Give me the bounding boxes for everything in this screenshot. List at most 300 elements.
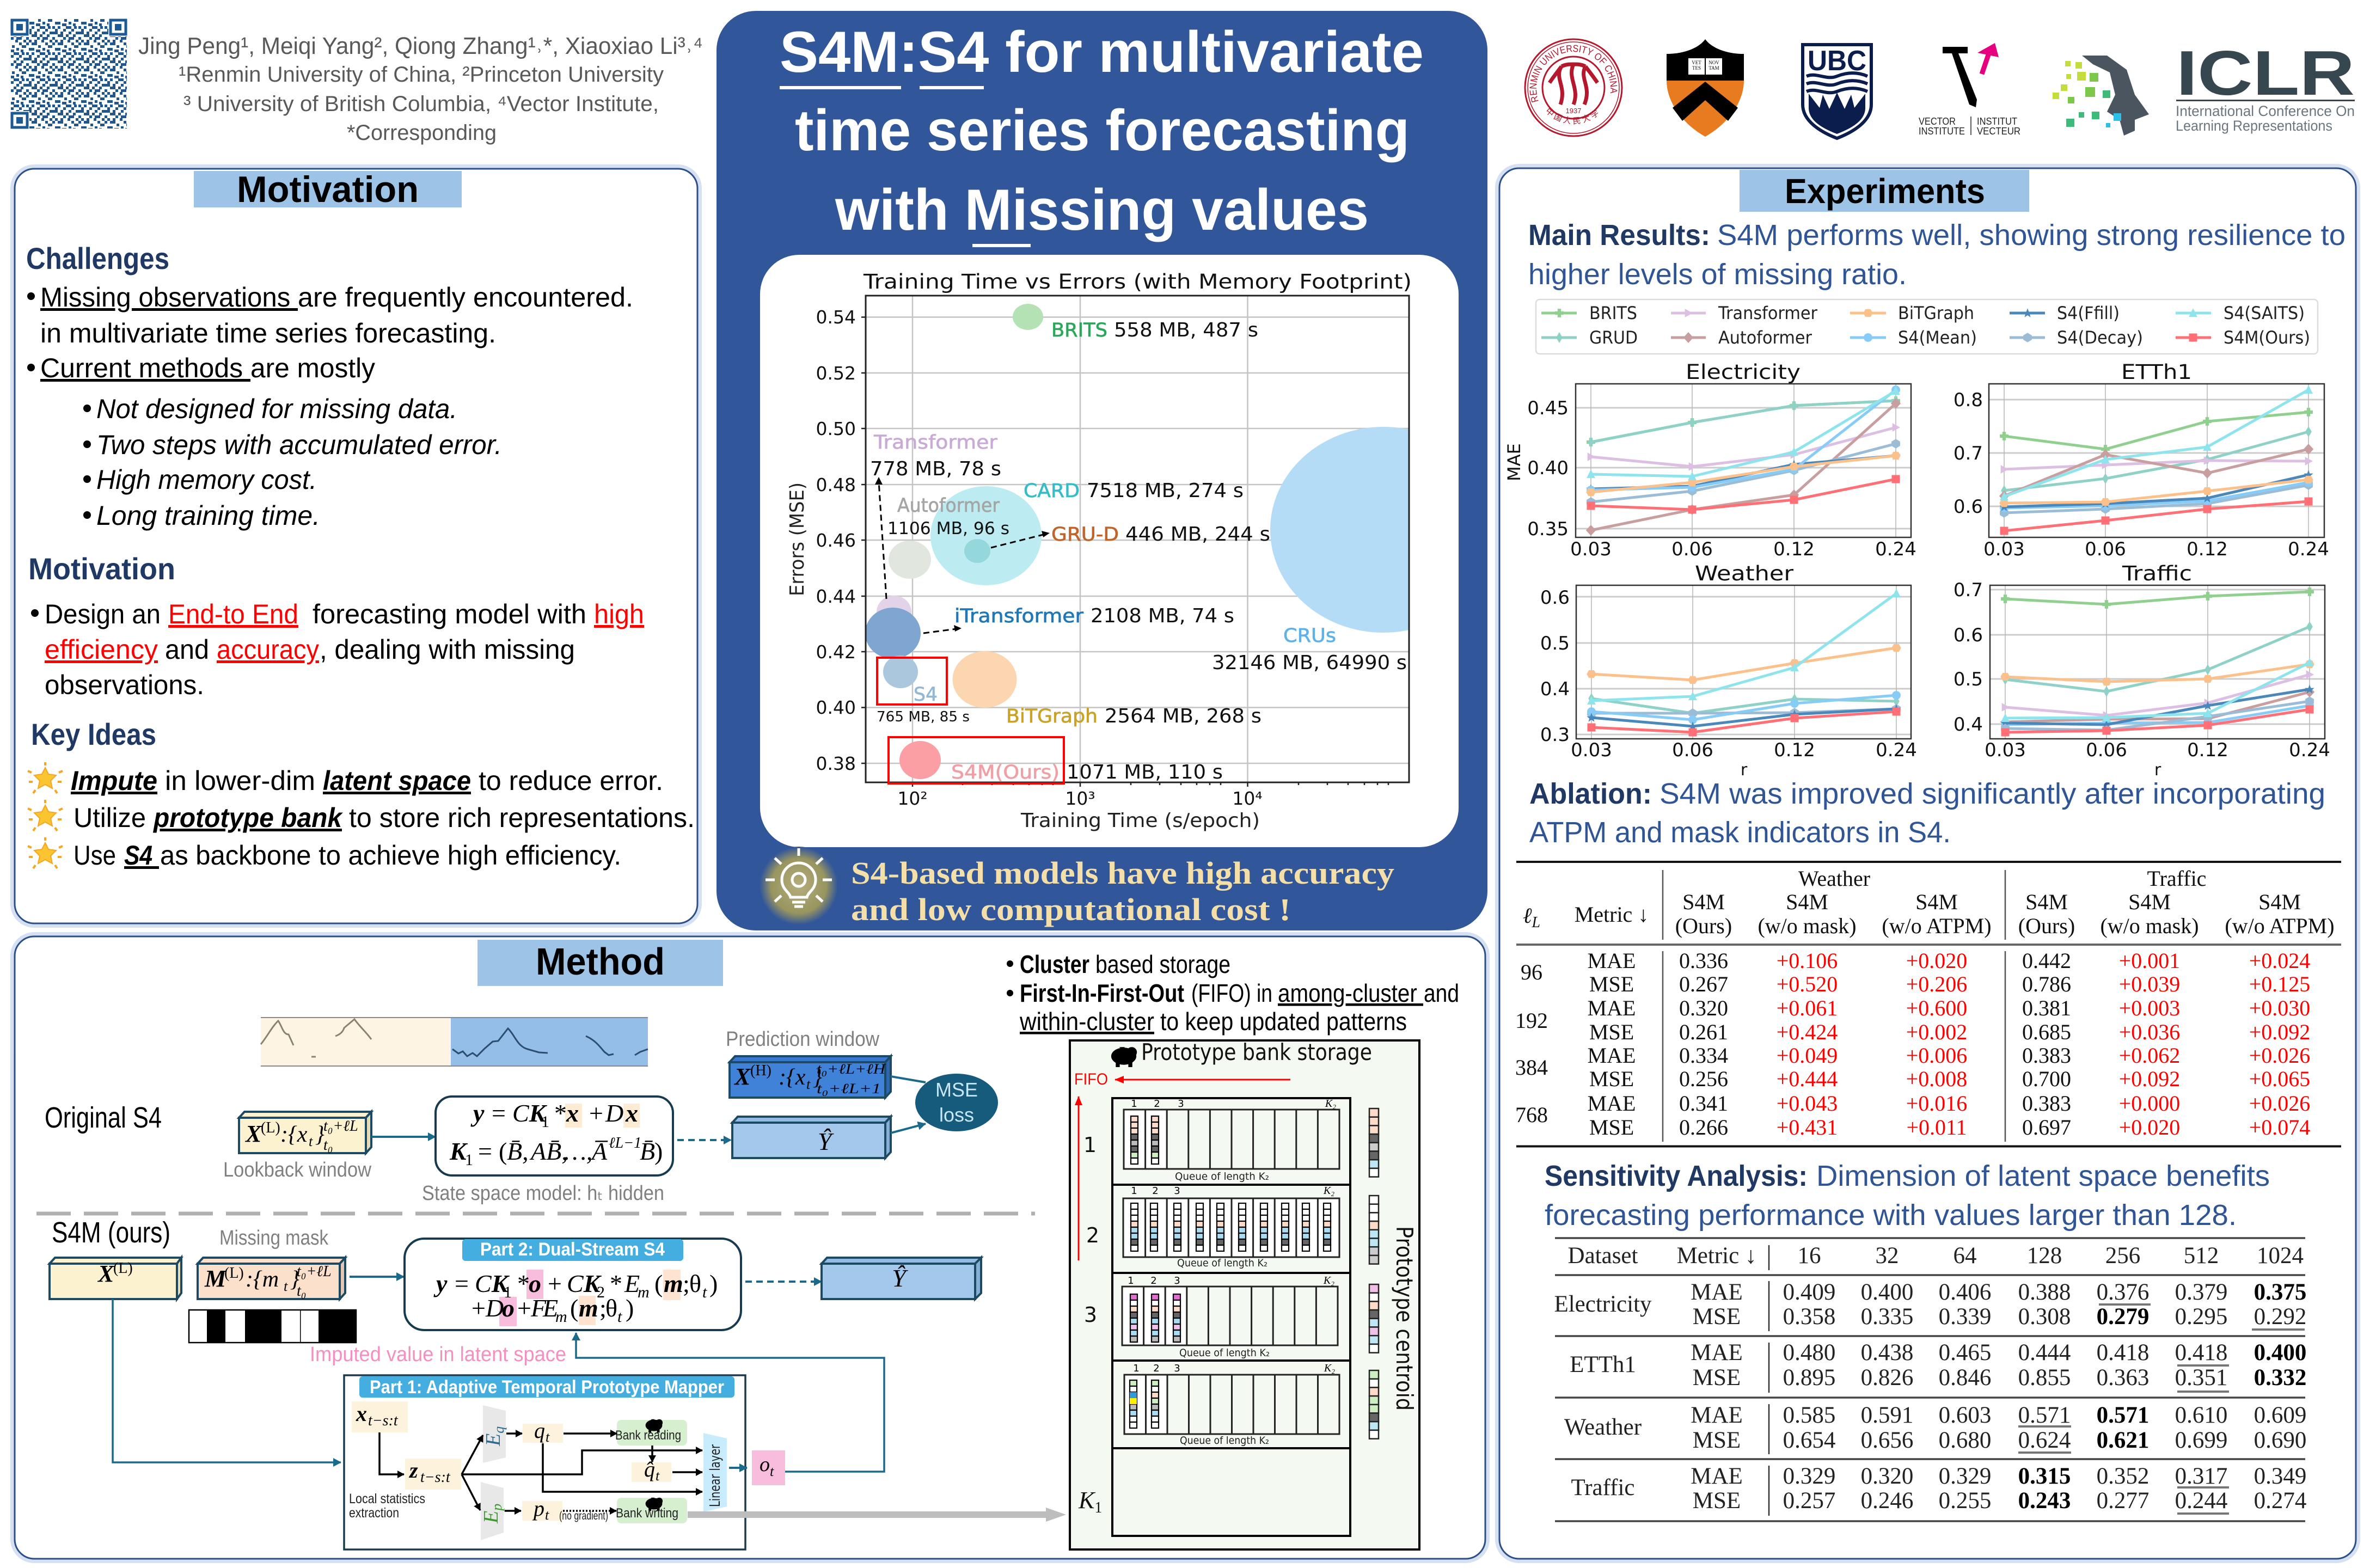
equation: o <box>502 1294 515 1322</box>
label: part 2: Part 2: Dual-Stream S4 <box>480 1239 665 1260</box>
prototype bank storage <box>1070 1039 1419 1549</box>
bubble labels <box>870 319 1407 783</box>
queue cluster 3: 1 <box>1128 1275 1134 1287</box>
takeaway text: and low computational cost ! <box>851 892 1291 927</box>
challenges bullets: are mostly <box>250 353 375 383</box>
bank reading <box>615 1419 687 1445</box>
table: sensitivity analysis: 0.591 <box>1861 1402 1913 1428</box>
bubble labels: 558 MB, 487 s <box>1114 319 1258 341</box>
table: sensitivity analysis: 0.329 <box>1939 1463 1991 1489</box>
linear layer <box>703 1433 727 1512</box>
variable chips: t <box>656 1468 660 1484</box>
line chart: electricity: 0.24 <box>1875 538 1916 560</box>
table: ablation results: +0.003 <box>2119 996 2180 1020</box>
storage notes: among-cluster <box>1278 979 1423 1007</box>
table: ablation results: (Ours) <box>2018 914 2075 938</box>
table: ablation results: MSE <box>1589 972 1634 996</box>
caption: imputed value: Imputed value in latent space <box>310 1343 566 1366</box>
state space equation box: ℓL−1 <box>609 1135 641 1152</box>
dashed arrows <box>875 477 1050 633</box>
sensitivity analysis text: Sensitivity Analysis: <box>1545 1160 1808 1192</box>
table: ablation results: +0.001 <box>2119 948 2180 973</box>
table: sensitivity analysis: Traffic <box>1571 1475 1635 1500</box>
bank writing <box>616 1498 687 1523</box>
equation: ; <box>599 1294 607 1322</box>
queue cluster 4: 1 <box>1133 1363 1140 1374</box>
chart legend: Autoformer <box>1718 327 1812 348</box>
variable chips: x <box>356 1401 367 1426</box>
table: ablation results: 0.266 <box>1679 1115 1728 1140</box>
sensitivity analysis text: Dimension of latent space benefits <box>1816 1160 2270 1192</box>
logo: ICLR: International Conference On <box>2176 103 2355 119</box>
queue cluster 3: K₂ <box>1323 1275 1334 1287</box>
table: sensitivity analysis: MAE <box>1691 1402 1743 1428</box>
state space equation box: 1 <box>465 1151 473 1169</box>
chart legend: S4(SAITS) <box>2224 303 2305 323</box>
line chart: weather: 0.6 <box>1540 587 1570 609</box>
logo: Princeton University: NOV <box>1708 60 1719 65</box>
queue cluster 1: 2 <box>1154 1098 1160 1110</box>
table: ablation results: 192 <box>1515 1008 1548 1033</box>
bubble labels: 1106 MB, 96 s <box>887 519 1009 538</box>
bubble labels: iTransformer <box>954 605 1084 627</box>
logo: Vector Institute <box>1919 43 2020 137</box>
table: ablation results: (w/o mask) <box>2100 914 2199 938</box>
table: sensitivity analysis: 0.621 <box>2097 1428 2149 1453</box>
table: ablation results: MAE <box>1588 1043 1636 1068</box>
equation: y <box>433 1270 448 1297</box>
table: sensitivity analysis: 128 <box>2027 1243 2062 1269</box>
line chart: electricity: 0.12 <box>1773 538 1815 560</box>
y axis tick labels: 0.44 <box>816 586 856 607</box>
label: S4M (ours): S4M (ours) <box>52 1216 170 1249</box>
line chart: ETTh1 <box>1954 360 2329 560</box>
table: sensitivity analysis: 0.358 <box>1783 1304 1835 1330</box>
logo: Vector Institute: VECTOR <box>1919 116 1956 127</box>
centroid stacks <box>1369 1108 1379 1439</box>
queue cluster 3: 3 <box>1174 1275 1180 1287</box>
part 1: adaptive temporal prototype mapper <box>344 1375 745 1549</box>
ground truth box: X <box>733 1063 751 1090</box>
table: sensitivity analysis: 32 <box>1875 1243 1899 1269</box>
table: sensitivity analysis: 0.255 <box>1939 1488 1991 1514</box>
queue cluster 4: K₂ <box>1324 1362 1335 1374</box>
table: ablation results: +0.106 <box>1777 948 1838 973</box>
state space equation box <box>436 1097 673 1175</box>
challenges bullets: in multivariate time series forecasting. <box>40 318 496 348</box>
table: ablation results: +0.016 <box>1906 1091 1967 1116</box>
bubble labels: 765 MB, 85 s <box>877 709 970 725</box>
input box: lookback window: (L) <box>261 1119 280 1136</box>
main results text: higher levels of missing ratio. <box>1528 258 1907 291</box>
chart legend: S4M(Ours) <box>2224 327 2310 348</box>
line chart: electricity: 0.35 <box>1527 518 1569 540</box>
caption: missing mask: Missing mask <box>219 1227 329 1250</box>
table: sensitivity analysis: 0.349 <box>2254 1463 2306 1489</box>
equation: ( <box>570 1294 578 1322</box>
table: ablation results: S4M <box>2128 890 2171 914</box>
chart legend: S4(Decay) <box>2057 327 2143 348</box>
table: ablation results: +0.011 <box>1906 1115 1967 1140</box>
queue cluster 2 <box>1123 1185 1339 1269</box>
table: sensitivity analysis: 0.257 <box>1783 1488 1835 1514</box>
queue cluster 1 <box>1124 1098 1339 1183</box>
sensitivity analysis text: forecasting performance with values larger than 128. <box>1545 1199 2237 1232</box>
equation: + <box>517 1294 531 1322</box>
variable chips <box>352 1401 671 1523</box>
table: sensitivity analysis: 0.308 <box>2018 1304 2071 1330</box>
table: ablation results: +0.600 <box>1906 996 1967 1020</box>
table: ablation results: +0.065 <box>2249 1067 2310 1091</box>
internal arrows <box>379 1432 702 1511</box>
table: sensitivity analysis: 0.388 <box>2018 1279 2071 1305</box>
state space equation box: x <box>566 1099 579 1127</box>
variable chips: q̂ <box>644 1457 655 1481</box>
authors and affiliations: Jing Peng¹, Meiqi Yang², Qiong Zhang¹˒*, Xiaoxiao Li³˒⁴ <box>138 33 703 59</box>
table: ablation results: 0.334 <box>1679 1043 1728 1068</box>
queue cluster 3: 2 <box>1150 1275 1157 1287</box>
line chart: traffic: 0.03 <box>1985 739 2026 761</box>
state space equation box: AB̄, <box>529 1137 568 1165</box>
line chart: ETTh1: 0.12 <box>2187 538 2228 560</box>
sensitivity analysis text <box>1545 1160 2270 1232</box>
table: sensitivity analysis: 256 <box>2105 1243 2140 1269</box>
authors and affiliations: *Corresponding <box>347 121 497 145</box>
equation: E <box>624 1270 640 1297</box>
queue cluster 4: Queue of length K₂ <box>1180 1435 1269 1447</box>
subheading: challenges: Challenges <box>26 241 169 275</box>
variable chips: t−s:t <box>420 1469 451 1486</box>
key ideas list: Use <box>74 840 116 871</box>
panel: experiments <box>1499 168 2356 1559</box>
equation: D <box>485 1294 504 1322</box>
line chart: electricity: 0.03 <box>1570 538 1612 560</box>
equation: * <box>610 1270 622 1297</box>
caption: local statistics: Local statistics <box>349 1491 425 1506</box>
mask strip <box>189 1310 356 1343</box>
table: ablation results: +0.008 <box>1906 1067 1967 1091</box>
line chart: weather: r <box>1741 761 1748 780</box>
bubble labels: GRU-D <box>1051 524 1119 546</box>
motivation bullet: high <box>594 599 644 629</box>
equation: θ <box>689 1270 701 1297</box>
table: sensitivity analysis: 0.609 <box>2254 1402 2306 1428</box>
table: ablation results: 0.697 <box>2022 1115 2071 1140</box>
heading: motivation: Motivation <box>237 169 419 210</box>
table: sensitivity analysis: 0.418 <box>2097 1340 2149 1365</box>
key ideas list: S4 <box>124 840 159 871</box>
icon: light bulb <box>766 848 832 906</box>
logo: Renmin University of China: 1937 <box>1566 107 1581 115</box>
table: sensitivity analysis: 0.656 <box>1861 1428 1913 1453</box>
caption: lookback window: Lookback window <box>223 1159 371 1181</box>
y axis tick labels: 0.40 <box>816 697 856 718</box>
table: ablation results: MAE <box>1588 948 1636 973</box>
challenges bullets: High memory cost. <box>96 464 317 495</box>
input box: X(L): (L) <box>113 1260 133 1277</box>
FIFO arrows: FIFO <box>1074 1070 1108 1088</box>
table: ablation results: +0.061 <box>1777 996 1838 1020</box>
input box: mask M(L): (L) <box>224 1265 244 1282</box>
table: ablation results: +0.000 <box>2119 1091 2180 1116</box>
table: sensitivity analysis: 0.699 <box>2175 1428 2227 1453</box>
table: ablation results: Traffic <box>2147 866 2206 891</box>
key ideas list: latent space <box>323 765 471 796</box>
state space equation box: B̄ <box>640 1137 655 1165</box>
input box: lookback window: } <box>315 1122 324 1147</box>
cluster indices: 1 <box>1083 1133 1097 1157</box>
connector: input to part 1 <box>113 1299 341 1462</box>
motivation bullet <box>31 599 644 700</box>
main results text <box>1528 219 2346 291</box>
state space equation box: ) <box>654 1137 663 1165</box>
table: ablation results: +0.006 <box>1906 1043 1967 1068</box>
chart legend: BiTGraph <box>1898 303 1974 323</box>
title: S4M:S4 for multivariate <box>780 19 1424 84</box>
table: sensitivity analysis: MAE <box>1691 1279 1743 1305</box>
line chart: weather: 0.5 <box>1540 633 1570 654</box>
line chart: weather: 0.03 <box>1571 739 1612 761</box>
bubble labels: 1071 MB, 110 s <box>1067 761 1223 783</box>
table: ablation results: Weather <box>1798 866 1870 891</box>
dashed arrow to prediction <box>677 1139 731 1141</box>
state space equation box: = <box>478 1137 492 1165</box>
subheading: key ideas: Key Ideas <box>31 717 156 751</box>
table: sensitivity analysis: ETTh1 <box>1570 1352 1636 1377</box>
cluster rows <box>1112 1098 1350 1536</box>
ground truth box: t₀+ℓL+ℓH <box>817 1061 886 1077</box>
state space equation box: x <box>625 1099 638 1127</box>
motivation bullet: forecasting model with <box>313 599 586 629</box>
variable chips: z <box>408 1458 418 1483</box>
dashed divider <box>36 1212 1035 1215</box>
table: ablation results: 0.383 <box>2022 1043 2071 1068</box>
input box: X(L): X <box>97 1260 115 1287</box>
subheading: motivation: Motivation <box>28 552 175 586</box>
queue cluster 2: 1 <box>1131 1185 1137 1197</box>
motivation bullet: Design an <box>45 599 161 629</box>
table: sensitivity analysis: 512 <box>2184 1243 2219 1269</box>
table: ablation results: MSE <box>1589 1067 1634 1091</box>
line chart: ETTh1: 0.03 <box>1983 538 2025 560</box>
key ideas list: to store rich representations. <box>349 803 695 833</box>
S4M output box <box>822 1258 981 1299</box>
MSE loss node: MSE <box>935 1079 978 1101</box>
equation: m <box>555 1308 567 1326</box>
motivation bullet: efficiency <box>45 634 158 665</box>
queue cluster 4: 3 <box>1174 1363 1180 1374</box>
bubble labels: 778 MB, 78 s <box>870 458 1001 480</box>
line chart: traffic: 0.06 <box>2086 739 2127 761</box>
bubble labels: 2564 MB, 268 s <box>1105 705 1262 727</box>
table: ablation results: +0.431 <box>1777 1115 1838 1140</box>
bubble labels: Autoformer <box>897 495 1000 517</box>
line chart: weather: 0.06 <box>1672 739 1713 761</box>
line chart: traffic: 0.12 <box>2187 739 2228 761</box>
table: sensitivity analysis: 0.690 <box>2254 1428 2306 1453</box>
key ideas list: prototype bank <box>152 803 343 833</box>
ground truth box: :{x <box>779 1065 806 1090</box>
table: sensitivity analysis: 0.418 <box>2175 1340 2227 1365</box>
cluster indices: 1 <box>1094 1499 1102 1516</box>
queue cluster 2: 2 <box>1152 1185 1159 1197</box>
equation: m <box>579 1294 598 1322</box>
table: sensitivity analysis: 0.317 <box>2175 1463 2227 1489</box>
y axis tick labels: 0.48 <box>816 474 856 495</box>
table: ablation results: MSE <box>1589 1115 1634 1140</box>
authors and affiliations <box>138 33 703 145</box>
challenges bullets: Long training time. <box>96 500 320 531</box>
logo: ICLR: Learning Representations <box>2176 118 2332 134</box>
input box: lookback window: X <box>244 1120 262 1147</box>
takeaway callout <box>760 847 1394 927</box>
chart legend: S4(Ffill) <box>2057 303 2120 323</box>
queue cluster 4: 2 <box>1153 1363 1160 1374</box>
logo: Princeton University: VET <box>1692 60 1701 65</box>
table: ablation results: 0.442 <box>2022 948 2071 973</box>
icon text: ICLR: ICLR <box>2176 38 2355 108</box>
bubble labels: BRITS <box>1051 320 1107 341</box>
equation: + <box>471 1294 486 1322</box>
table: sensitivity analysis: Metric ↓ <box>1677 1243 1756 1269</box>
queue cluster 1: K₂ <box>1325 1098 1336 1110</box>
gray arrow to prototype bank <box>688 1508 1066 1522</box>
line chart: ETTh1: ETTh1 <box>2121 360 2192 384</box>
x axis tick labels: 10⁴ <box>1232 788 1263 809</box>
line chart: electricity: 0.06 <box>1671 538 1713 560</box>
equation: ) <box>626 1294 634 1322</box>
table: sensitivity analysis: 0.571 <box>2097 1402 2149 1428</box>
panel: motivation <box>15 169 697 923</box>
queue cluster 1: 1 <box>1131 1098 1137 1110</box>
table: sensitivity analysis: 0.363 <box>2097 1365 2149 1391</box>
storage notes: and <box>1424 979 1459 1007</box>
table: ablation results: +0.030 <box>2249 996 2310 1020</box>
encoder E_p: E <box>480 1511 503 1523</box>
table: ablation results: 0.341 <box>1679 1091 1728 1116</box>
table: ablation results: S4M <box>2258 890 2301 914</box>
ablation text <box>1529 777 2325 849</box>
table: ablation results: MSE <box>1589 1020 1634 1044</box>
bubble labels: S4M(Ours) <box>951 762 1060 783</box>
table: sensitivity analysis: MSE <box>1693 1304 1741 1330</box>
table: ablation results: S4M <box>1786 890 1828 914</box>
logo: Renmin University of China <box>1524 38 1622 137</box>
equation: ) <box>709 1270 718 1297</box>
line chart: electricity <box>1527 360 1916 560</box>
key ideas list: Impute <box>71 765 157 796</box>
table: ablation results: MAE <box>1588 1091 1636 1116</box>
state space equation box: y <box>470 1099 485 1127</box>
table: ablation results: +0.020 <box>2119 1115 2180 1140</box>
queue cluster 4 <box>1124 1362 1339 1447</box>
arrow: mask to dual stream <box>350 1276 404 1278</box>
motivation bullet: observations. <box>45 670 204 700</box>
table: ablation results: (w/o ATPM) <box>1882 914 1992 938</box>
equation: 2 <box>597 1283 605 1301</box>
table: sensitivity analysis: 0.409 <box>1783 1279 1835 1305</box>
table: ablation results: +0.026 <box>2249 1091 2310 1116</box>
line chart: traffic: 0.4 <box>1954 714 1983 736</box>
encoder E_p: p <box>489 1504 505 1512</box>
motivation bullet: End-to End <box>168 599 298 629</box>
table: ablation results: (w/o ATPM) <box>2225 914 2335 938</box>
table: ablation results: L <box>1532 914 1540 931</box>
MSE loss node: loss <box>939 1104 974 1126</box>
state space equation box: 1 <box>541 1113 549 1131</box>
line chart: ETTh1: 0.8 <box>1954 389 1983 411</box>
dashed arrow to S4M output <box>745 1281 822 1283</box>
chart legend: GRUD <box>1589 327 1638 348</box>
storage notes: (FIFO) in <box>1191 979 1272 1007</box>
table: sensitivity analysis: 0.292 <box>2254 1304 2306 1330</box>
line chart: traffic: 0.7 <box>1954 579 1983 601</box>
line chart: traffic: r <box>2154 761 2161 780</box>
challenges bullets: Two steps with accumulated error. <box>96 430 502 460</box>
line chart: traffic: Traffic <box>2122 562 2192 585</box>
equation: = <box>455 1270 469 1297</box>
dual-stream S4 box <box>405 1239 741 1330</box>
table: ablation results: +0.125 <box>2249 972 2310 996</box>
logo: ICLR <box>2053 38 2355 136</box>
y axis tick labels: 0.38 <box>816 753 856 774</box>
bubble labels: CARD <box>1024 480 1080 502</box>
caption: local statistics: extraction <box>349 1505 399 1521</box>
cluster indices: 2 <box>1086 1223 1099 1247</box>
equation: t <box>702 1283 707 1301</box>
equation: θ <box>605 1294 617 1322</box>
table: sensitivity analysis: 0.277 <box>2097 1488 2149 1514</box>
table: ablation results: 0.267 <box>1679 972 1728 996</box>
table: sensitivity analysis: Dataset <box>1568 1243 1638 1269</box>
heading: experiments <box>1740 170 2029 212</box>
line chart: ETTh1: 0.6 <box>1954 496 1983 518</box>
table: sensitivity analysis: 0.680 <box>1939 1428 1991 1453</box>
logo: Renmin University of China: 中国人民大学 <box>1546 108 1599 125</box>
table: ablation results: 0.381 <box>2022 996 2071 1020</box>
table: sensitivity analysis: MSE <box>1693 1488 1741 1514</box>
motivation bullet: , dealing with missing <box>320 634 575 665</box>
table: sensitivity analysis: 0.339 <box>1939 1304 1991 1330</box>
equation: * <box>517 1270 530 1297</box>
icon: piggy bank <box>1111 1047 1137 1067</box>
table: sensitivity analysis: 0.895 <box>1783 1365 1835 1391</box>
table: ablation results: (Ours) <box>1675 914 1732 938</box>
table: sensitivity analysis: 1024 <box>2257 1243 2304 1269</box>
bubble plot <box>861 295 1410 787</box>
cluster indices: K <box>1079 1487 1094 1514</box>
title: time series forecasting <box>795 97 1410 163</box>
table: ablation results: 0.256 <box>1679 1067 1728 1091</box>
takeaway text <box>851 855 1394 927</box>
table: ablation results: +0.206 <box>1906 972 1967 996</box>
table: ablation results: +0.074 <box>2249 1115 2310 1140</box>
challenges bullets: Not designed for missing data. <box>96 394 457 424</box>
storage notes: within-cluster <box>1019 1007 1154 1036</box>
line chart: traffic <box>1954 562 2330 780</box>
logo: Vector Institute: VECTEUR <box>1977 126 2020 137</box>
table: ablation results: +0.520 <box>1777 972 1838 996</box>
state space equation box: * <box>554 1099 567 1127</box>
table: sensitivity analysis: 0.438 <box>1861 1340 1913 1365</box>
table: sensitivity analysis: 0.610 <box>2175 1402 2227 1428</box>
ground truth box: } <box>813 1065 822 1090</box>
key ideas list: in lower-dim <box>165 765 315 796</box>
table: sensitivity analysis: Weather <box>1564 1414 1642 1440</box>
equation: m <box>664 1270 683 1297</box>
x axis tick labels: 10² <box>897 788 928 809</box>
queue cluster 3 <box>1122 1275 1338 1359</box>
